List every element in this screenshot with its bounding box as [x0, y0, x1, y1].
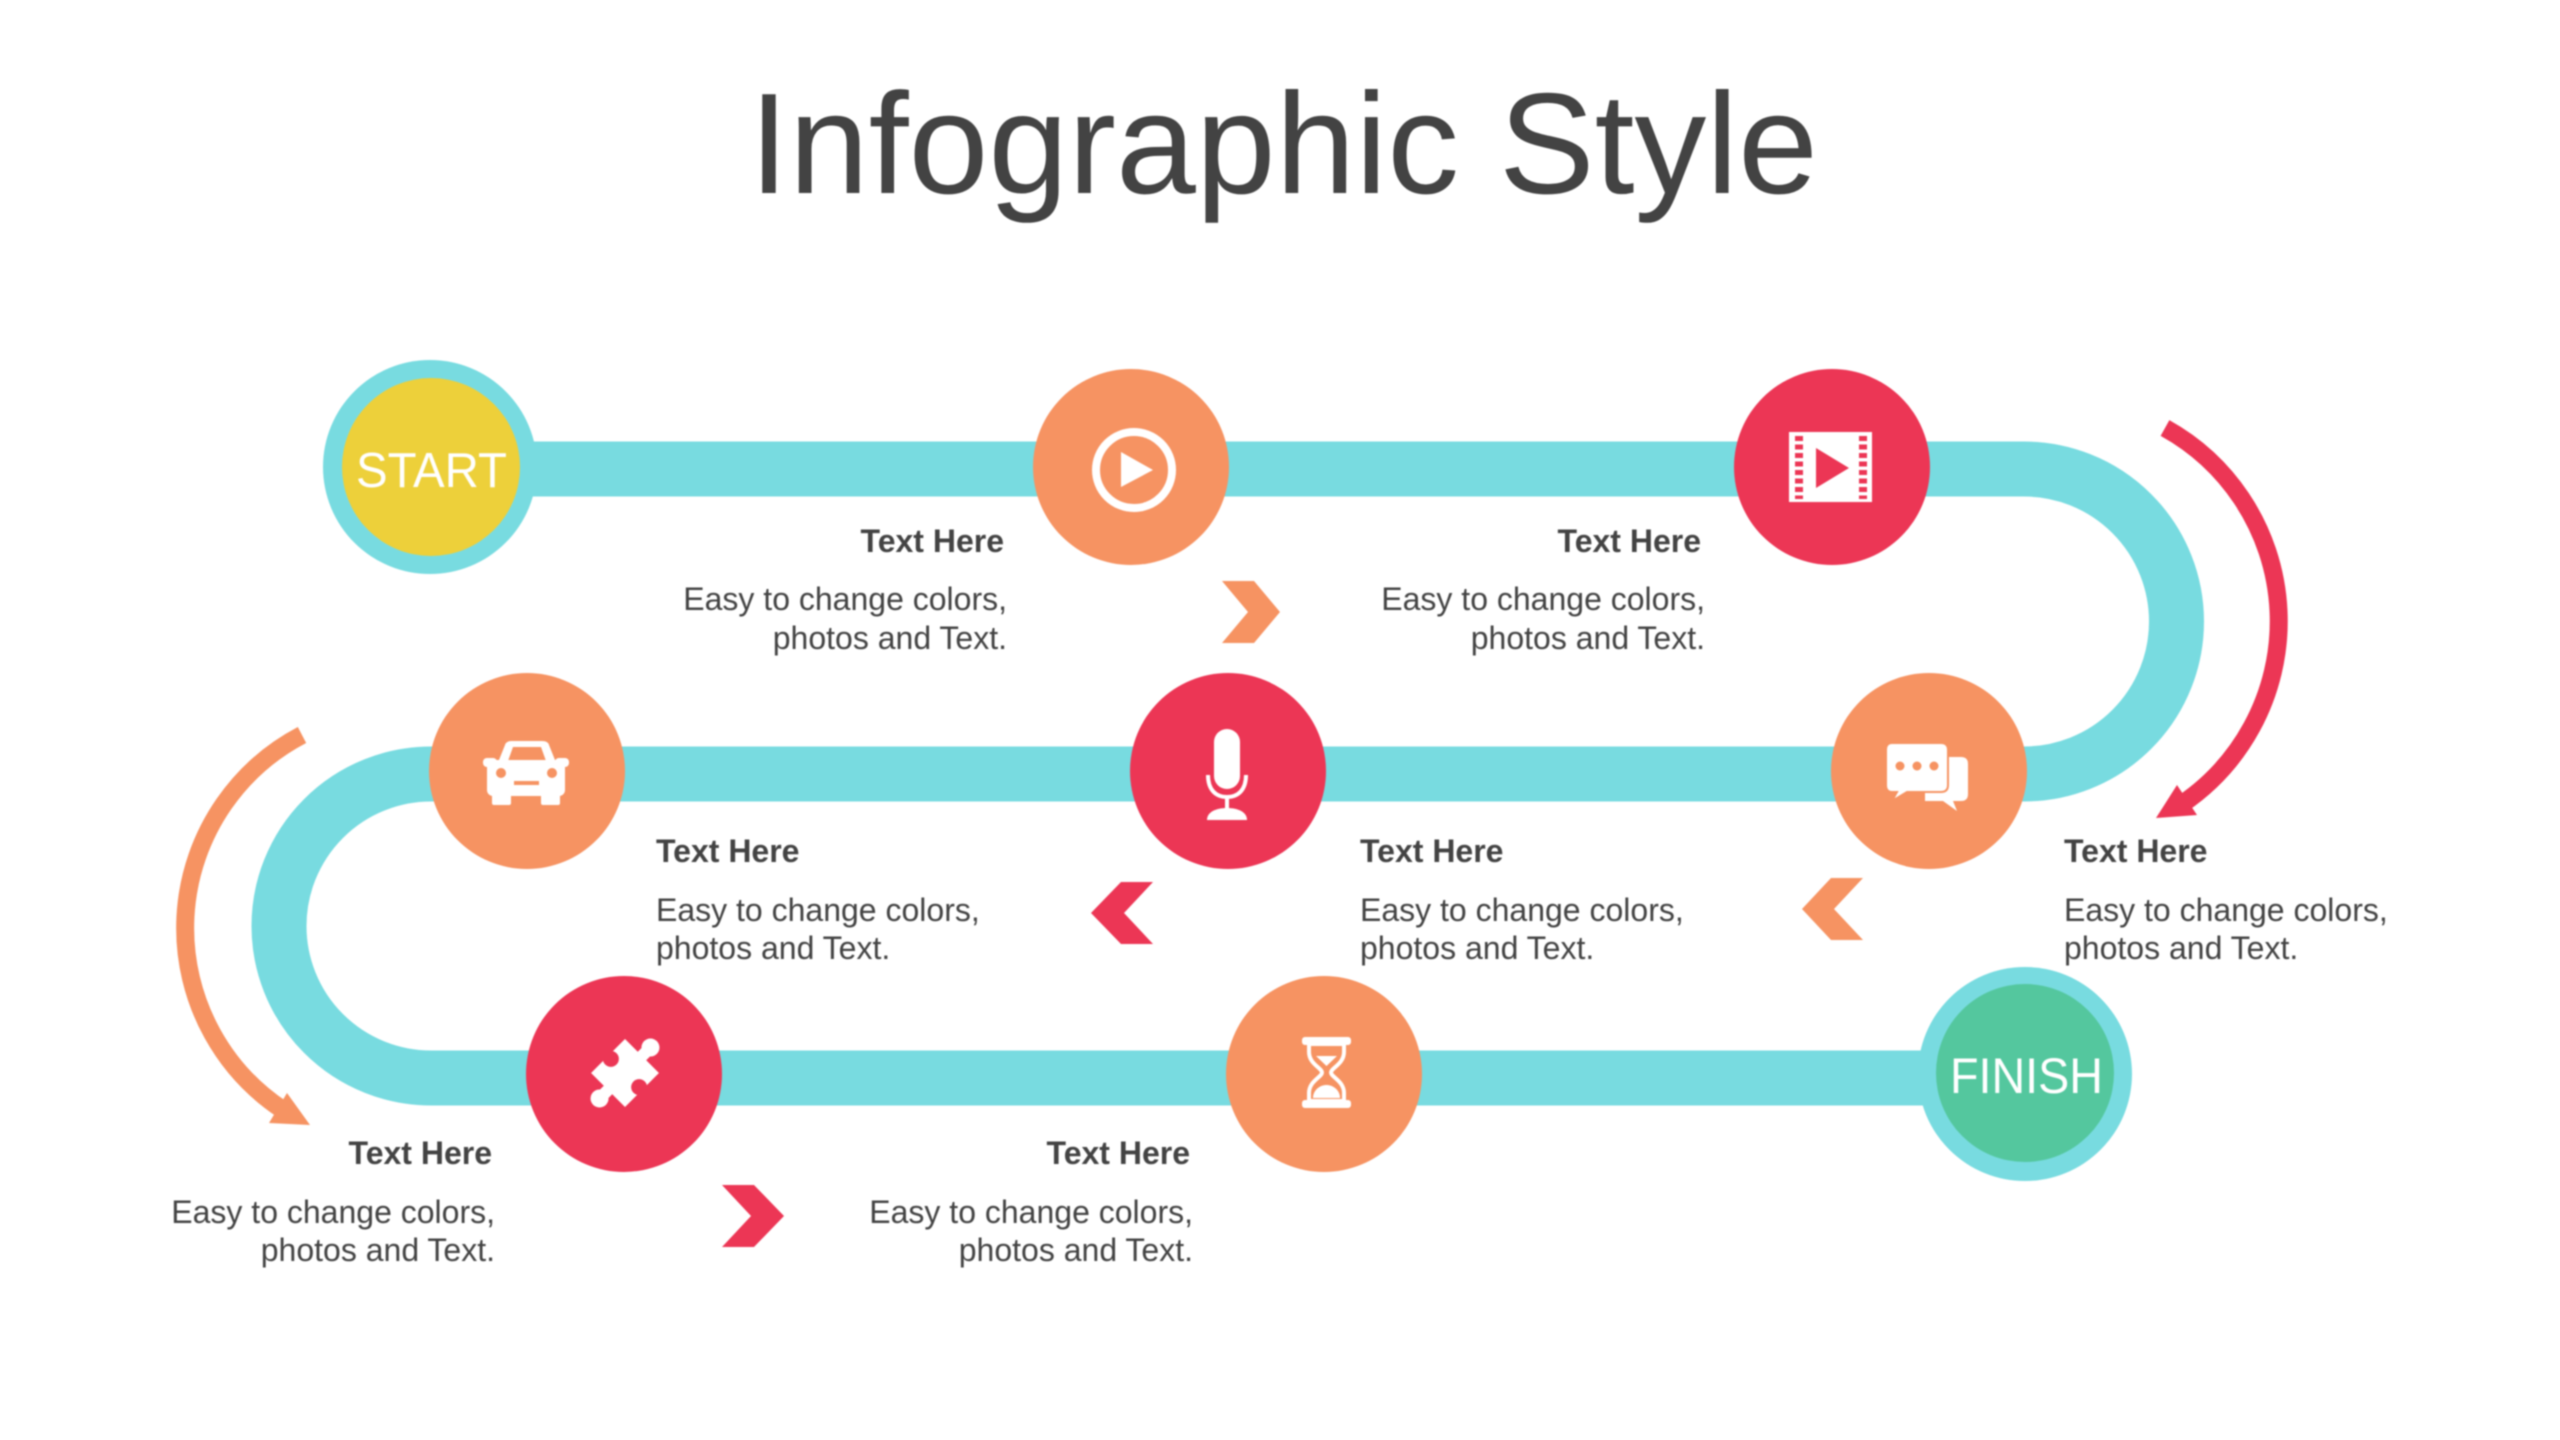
- icon: film: [1789, 432, 1872, 502]
- step 6: puzzle node: [526, 976, 722, 1172]
- text block: step 6: [171, 1135, 495, 1268]
- text block: step 3: Easy to change colors,: [2064, 892, 2388, 928]
- step 7: hourglass node: [1226, 976, 1422, 1172]
- icon: chat bubbles: [1886, 743, 1968, 811]
- chevron: orange left: [1802, 878, 1863, 940]
- text block: step 3: Text Here: [2064, 833, 2207, 869]
- text block: step 4: [1360, 833, 1684, 966]
- step 1: play node: [1033, 369, 1229, 565]
- text block: step 2: Text Here: [1558, 523, 1701, 559]
- text block: step 5: Easy to change colors,: [656, 892, 980, 928]
- icon: car: [483, 741, 569, 805]
- chevron: orange right: [1222, 581, 1280, 643]
- finish node: FINISH: [1950, 1048, 2103, 1104]
- start node: [323, 360, 537, 574]
- step 4: microphone node: [1130, 673, 1326, 869]
- text block: step 2: [1381, 523, 1705, 656]
- text block: step 1: photos and Text.: [773, 620, 1007, 656]
- curved arrow: orange, left side: [185, 735, 310, 1125]
- text block: step 4: Easy to change colors,: [1360, 892, 1684, 928]
- text block: step 1: Easy to change colors,: [683, 581, 1007, 617]
- step 5: car node: [429, 673, 625, 869]
- step 3: chat node: [1831, 673, 2027, 869]
- text block: step 7: Easy to change colors,: [869, 1194, 1193, 1230]
- text block: step 6: Text Here: [349, 1135, 492, 1171]
- text block: step 6: Easy to change colors,: [171, 1194, 495, 1230]
- text block: step 2: photos and Text.: [1471, 620, 1705, 656]
- text block: step 5: Text Here: [656, 833, 799, 869]
- text block: step 4: photos and Text.: [1360, 930, 1594, 966]
- text block: step 3: photos and Text.: [2064, 930, 2298, 966]
- title: Infographic Style: [749, 64, 1818, 224]
- text block: step 2: Easy to change colors,: [1381, 581, 1705, 617]
- chevron: red right: [722, 1185, 784, 1247]
- step 2: video node: [1734, 369, 1930, 565]
- text block: step 7: [869, 1135, 1193, 1268]
- text block: step 7: photos and Text.: [959, 1232, 1193, 1268]
- text block: step 5: photos and Text.: [656, 930, 890, 966]
- finish node: [1918, 967, 2132, 1181]
- start node: START: [356, 444, 507, 498]
- text block: step 6: photos and Text.: [261, 1232, 495, 1268]
- text block: step 5: [656, 833, 980, 966]
- text block: step 7: Text Here: [1047, 1135, 1190, 1171]
- icon: hourglass: [1302, 1037, 1351, 1108]
- icon: play: [1096, 432, 1172, 508]
- text block: step 3: [2064, 833, 2388, 966]
- winding path track: [279, 469, 2176, 1078]
- curved arrow: red, right side: [2156, 428, 2279, 818]
- icon: puzzle piece: [573, 1021, 677, 1125]
- icon: microphone: [1207, 729, 1247, 820]
- chevron: red left: [1091, 882, 1153, 944]
- text block: step 1: Text Here: [861, 523, 1004, 559]
- text block: step 1: [683, 523, 1007, 656]
- text block: step 4: Text Here: [1360, 833, 1503, 869]
